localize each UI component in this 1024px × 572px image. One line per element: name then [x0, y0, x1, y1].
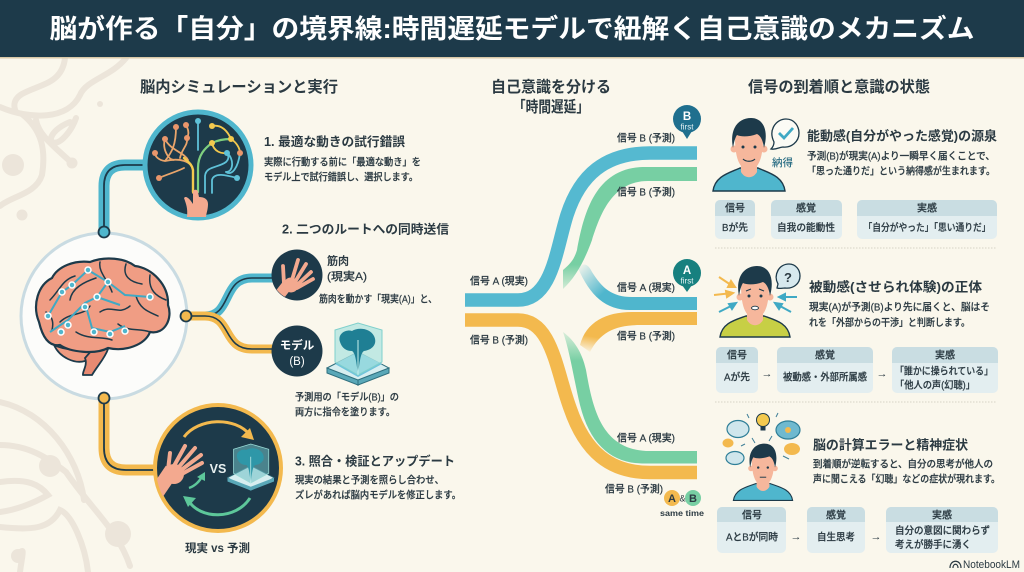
heading: time delay	[491, 78, 611, 116]
badge: B first: B	[683, 111, 691, 123]
text: step 1: 1. 最適な動きの試行錯誤	[264, 134, 405, 149]
table: computation error: →	[870, 531, 882, 543]
table: agency: 自我の能動性	[777, 221, 835, 234]
table: passivity	[716, 347, 998, 393]
label: muscle: (現実A)	[327, 269, 367, 283]
table: agency: 実感	[917, 202, 937, 214]
table: passivity: →	[762, 368, 772, 380]
text: model description	[295, 390, 399, 418]
badge: B first: first	[681, 122, 694, 132]
heading: arrival order: 信号の到着順と意識の状態	[748, 77, 930, 96]
flow labels	[470, 132, 675, 496]
table: passivity: 信号	[727, 348, 747, 362]
table: agency: 信号	[725, 202, 745, 214]
icon: incoming arrows	[714, 277, 797, 312]
table: computation error: 信号	[742, 508, 762, 522]
text: computation error	[813, 438, 1000, 486]
flow: green top	[563, 167, 697, 289]
flow labels: 信号 B (予測)	[605, 482, 663, 496]
text: computation error: 到着順が逆転すると、自分の思考が他人の	[813, 458, 993, 470]
icon: model circle: (B)	[289, 356, 305, 368]
icon: muscle hand	[272, 250, 322, 302]
text: agency: 予測(B)が現実(A)より一瞬早く届くことで、	[807, 150, 995, 162]
badge: A and B same time: same time	[660, 508, 704, 518]
text: step 3: ズレがあれば脳内モデルを修正します。	[295, 488, 461, 502]
text: agency	[807, 128, 997, 178]
flow labels: 信号 B (予測)	[617, 330, 675, 342]
table: passivity: Aが先	[724, 370, 750, 384]
flow: green bottom	[563, 332, 697, 464]
text: step 3: 現実の結果と予測を照らし合わせ、	[295, 474, 444, 486]
section: passivity	[714, 264, 998, 393]
table: agency: 「自分がやった」「思い通りだ」	[864, 221, 990, 234]
table: computation error: 感覚	[826, 508, 846, 522]
flow labels: 信号 B (予測)	[617, 186, 675, 198]
badge: B first	[673, 105, 701, 139]
text: computation error: 声に聞こえる「幻聴」などの症状が現れます。	[813, 472, 1000, 486]
section: agency	[713, 118, 997, 239]
table: computation error	[717, 507, 998, 553]
table: passivity: 実感	[935, 348, 955, 362]
text: passivity: 被動感(させられ体験)の正体	[809, 280, 982, 294]
badge: A first: first	[681, 276, 694, 286]
table: passivity: 「他人の声(幻聴)」	[895, 378, 975, 392]
flow labels: 信号 A (現実)	[470, 274, 528, 288]
logo: NotebookLM: NotebookLM	[963, 559, 1020, 571]
badge: A first: A	[683, 265, 691, 277]
panel: signal order and consciousness	[713, 77, 1000, 553]
table: agency: 感覚	[796, 202, 816, 214]
connectors to two routes	[186, 278, 274, 349]
text: passivity: れを「外部からの干渉」と判断します。	[809, 316, 970, 329]
badge: A and B same time: A	[668, 493, 676, 505]
icon: neural tree and finger	[145, 112, 251, 218]
label: reality vs prediction: 現実 vs 予測	[185, 541, 250, 555]
text: step 3	[295, 454, 461, 502]
flow labels: 信号 A (現実)	[617, 432, 675, 444]
background neuron pattern	[0, 58, 131, 572]
table: computation error: →	[790, 531, 802, 543]
text: agency: 「思った通りだ」という納得感が生まれます。	[807, 164, 995, 178]
text: model description: 両方に指令を塗ります。	[295, 406, 395, 418]
heading: simulation: 脳内シミュレーションと実行	[140, 78, 338, 96]
text: step 1: 実際に行動する前に「最適な動き」を	[264, 156, 421, 168]
icon: reality vs prediction: VS	[210, 462, 226, 476]
table: computation error: 実感	[932, 508, 952, 522]
table: computation error: 自分の意図に関わらず	[895, 524, 990, 537]
section: computation error	[717, 413, 1000, 553]
heading: time delay: 自己意識を分ける	[491, 78, 611, 96]
icon: confident person	[713, 118, 785, 191]
label: satisfied: 納得	[772, 156, 793, 169]
badge: A and B same time	[660, 490, 704, 518]
text: model description: 予測用の「モデル(B)」の	[295, 390, 399, 404]
icon: question bubble: ?	[784, 270, 792, 285]
table: computation error: 自生思考	[817, 530, 855, 544]
table: computation error: AとBが同時	[726, 530, 778, 544]
icon: model cube	[327, 323, 389, 385]
text: passivity: 現実(A)が予測(B)より先に届くと、脳はそ	[809, 300, 990, 314]
flow labels: 信号 B (予測)	[470, 334, 528, 346]
text: step 1	[264, 134, 421, 184]
icon: anxious person	[720, 266, 790, 337]
label: muscle: 筋肉	[327, 254, 349, 268]
badge: A and B same time: B	[689, 493, 697, 505]
panel: time delay	[465, 78, 704, 518]
table: passivity: 感覚	[815, 348, 835, 362]
heading: time delay: 「時間遅延」	[513, 98, 589, 116]
icon: check bubble	[771, 119, 799, 149]
flow: signal B yellow	[465, 320, 697, 472]
table: agency	[715, 200, 997, 239]
badge: A first	[673, 259, 701, 292]
connector nodes	[98, 226, 192, 404]
title: 脳が作る「自分」の境界線:時間遅延モデルで紐解く自己意識のメカニズム	[50, 14, 974, 44]
label: muscle	[327, 254, 367, 283]
table: passivity: 「誰かに操られている」	[895, 364, 993, 378]
icon: reality vs prediction	[155, 405, 281, 531]
table: agency: Bが先	[722, 221, 748, 234]
icon: brain circle	[21, 233, 187, 399]
table: passivity: 被動感・外部所属感	[783, 370, 867, 384]
text: computation error: 脳の計算エラーと精神症状	[813, 438, 968, 452]
flow: signal A teal	[465, 153, 697, 300]
badge: A and B same time: &	[679, 494, 686, 504]
text: step 2 heading: 2. 二つのルートへの同時送信	[282, 222, 450, 236]
flow labels: 信号 A (現実)	[617, 281, 675, 294]
text: agency: 能動感(自分がやった感覚)の源泉	[807, 128, 997, 144]
text: step 1: モデル上で試行錯誤し、選択します。	[264, 170, 418, 184]
flow labels: 信号 B (予測)	[617, 132, 675, 144]
icon: model circle: モデル	[280, 338, 315, 352]
table: computation error: 考えが勝手に湧く	[895, 538, 971, 551]
flow: yellow return	[580, 312, 697, 352]
icon: person with thoughts	[722, 413, 800, 500]
table: passivity: →	[876, 368, 888, 380]
icon: model circle	[272, 326, 322, 376]
icon: question bubble	[776, 264, 800, 288]
connector to step 3	[104, 400, 155, 470]
title banner	[0, 0, 1024, 58]
connector to step 1	[104, 165, 145, 232]
flow: teal return	[578, 265, 697, 310]
text: passivity	[809, 280, 990, 329]
panel: brain simulation	[21, 78, 461, 555]
text: step 3: 3. 照合・検証とアップデート	[295, 454, 455, 468]
text: muscle description: 筋肉を動かす「現実(A)」と、	[319, 292, 437, 306]
